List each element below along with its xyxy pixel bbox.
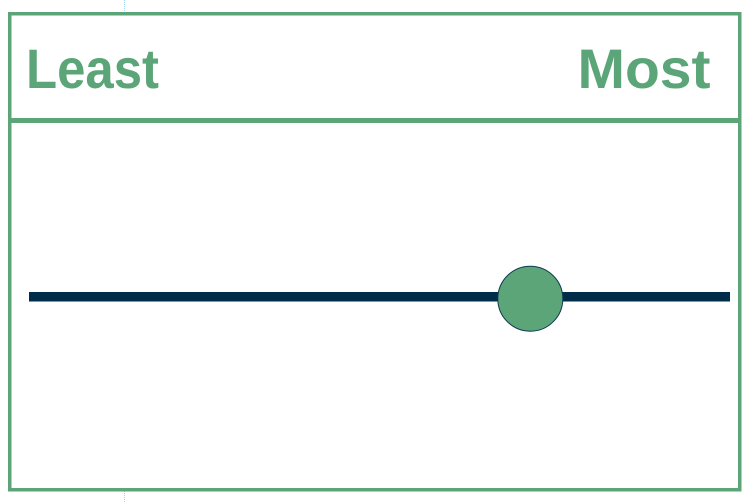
header divider (8, 118, 741, 123)
scale line (29, 292, 730, 302)
scale marker (498, 266, 563, 331)
label: Least: Least (26, 37, 159, 100)
label: Most: Most (578, 37, 710, 100)
